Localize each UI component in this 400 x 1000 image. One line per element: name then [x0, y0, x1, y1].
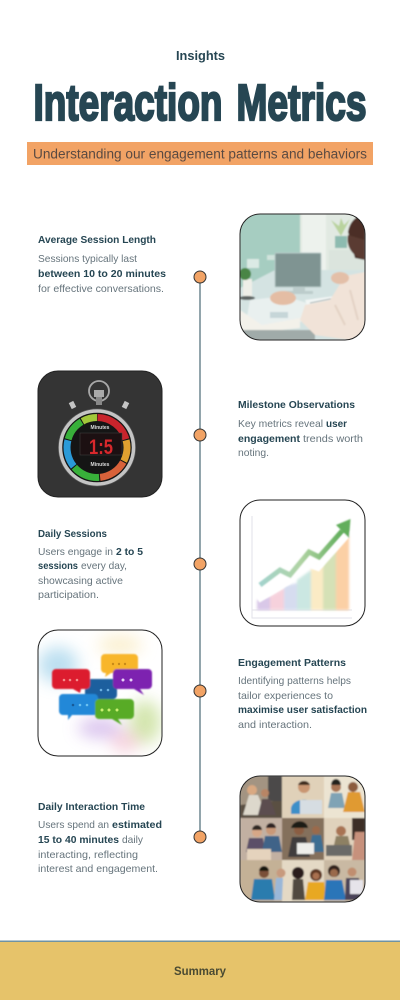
text block: daily interaction time: daily [122, 834, 144, 846]
title: Interaction [34, 74, 222, 131]
text block: average session length: Sessions typically last [38, 253, 137, 265]
watercolour wash [38, 635, 161, 752]
image: stopwatch [38, 371, 162, 497]
stopwatch dial [55, 405, 139, 490]
text block: engagement patterns: and interaction. [238, 719, 312, 731]
footer label: Summary [174, 966, 227, 978]
text block: milestone observations: noting. [238, 447, 269, 459]
image: collage of people [240, 776, 365, 902]
text block: daily interaction time: 15 to 40 minutes [38, 834, 119, 846]
subtitle banner [27, 142, 373, 165]
text block: daily sessions: every day, [81, 560, 127, 572]
text block: average session length: for effective conversations. [38, 283, 164, 295]
text block: milestone observations: Key metrics reveal [238, 418, 323, 430]
icon: stopwatch crown [71, 381, 127, 408]
text block: daily interaction time: interacting, reflecting [38, 849, 138, 861]
speech bubbles [52, 654, 152, 725]
text block: daily sessions: showcasing active [38, 575, 123, 587]
growth arrow [258, 519, 350, 600]
text block: milestone observations: Milestone Observations [238, 399, 355, 411]
text block: daily interaction time: interest and engagement. [38, 863, 158, 875]
text block: daily sessions: participation. [38, 589, 99, 601]
text block: engagement patterns: Identifying patterns helps [238, 675, 351, 687]
text block: engagement patterns: maximise user satisfaction [238, 704, 367, 716]
footer band [0, 940, 400, 1000]
bubble dots [63, 663, 133, 712]
text block: daily sessions: Daily Sessions [38, 528, 107, 540]
text block: engagement patterns [238, 657, 367, 731]
eyebrow heading: Insights [176, 49, 225, 63]
text block: milestone observations: user [326, 418, 347, 430]
text block: average session length: Average Session Length [38, 234, 156, 246]
text block: daily sessions: sessions [38, 560, 78, 572]
text block: daily interaction time: Daily Interaction Time [38, 801, 145, 813]
subtitle banner: Understanding our engagement patterns and behaviors [33, 146, 367, 162]
text block: average session length: between 10 to 20 minutes [38, 268, 166, 280]
text block: engagement patterns: Engagement Patterns [238, 657, 346, 669]
text block: engagement patterns: tailor experiences to [238, 690, 333, 702]
chart bars [257, 534, 349, 610]
stopwatch dial: 1:5 [89, 436, 113, 459]
image: person working at a desk [239, 214, 365, 340]
image: growth chart [240, 500, 365, 626]
stopwatch dial: Minutes [91, 425, 110, 431]
text block: daily interaction time [38, 801, 162, 875]
image: chat bubbles [38, 630, 162, 756]
stopwatch dial: Minutes [91, 462, 110, 468]
chart axes [252, 516, 352, 618]
text block: average session length [38, 234, 166, 295]
timeline [194, 271, 206, 843]
text block: milestone observations [238, 399, 363, 459]
text block: milestone observations: engagement [238, 433, 300, 445]
text block: daily sessions [38, 528, 143, 601]
text block: milestone observations: trends worth [303, 433, 363, 445]
text block: daily sessions: 2 to 5 [116, 546, 143, 558]
text block: daily interaction time: estimated [112, 819, 162, 831]
text block: daily sessions: Users engage in [38, 546, 113, 558]
text block: daily interaction time: Users spend an [38, 819, 109, 831]
